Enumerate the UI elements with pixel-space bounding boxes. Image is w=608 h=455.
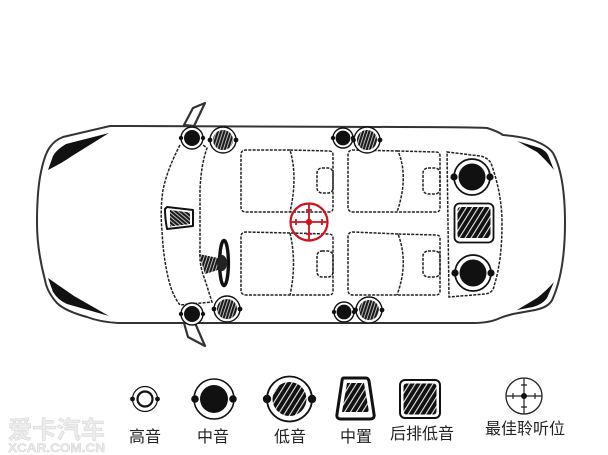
seat: front right xyxy=(241,232,333,295)
headlights xyxy=(48,133,554,316)
seat: front left xyxy=(241,150,333,212)
mid speaker: front left door xyxy=(179,127,205,149)
mid speaker: front right door xyxy=(179,303,205,325)
steering wheel xyxy=(199,240,228,286)
label: tweeter: 高音 xyxy=(129,428,161,446)
centre speaker xyxy=(165,207,193,229)
side mirrors xyxy=(184,103,205,346)
dashboard dashed outline xyxy=(161,145,212,305)
label: rear subwoofer: 后排低音 xyxy=(390,425,454,443)
mid speaker: rear right door xyxy=(332,302,356,322)
label: mid-range: 中音 xyxy=(197,428,229,446)
seat: rear right xyxy=(348,232,440,295)
legend: centre speaker xyxy=(337,378,374,446)
legend: rear subwoofer xyxy=(390,380,454,443)
mid speaker: rear left door xyxy=(331,128,355,148)
label: centre speaker: 中置 xyxy=(340,428,372,446)
legend: best listening position xyxy=(485,378,565,438)
low speaker: front left door xyxy=(208,127,238,153)
low speaker: rear right door xyxy=(353,297,384,323)
watermark: 爱卡汽车 xyxy=(8,417,105,444)
rear subwoofer xyxy=(454,204,494,242)
low speaker: front right door xyxy=(212,296,242,322)
rear deck mid speaker: lower xyxy=(451,255,495,291)
legend: woofer xyxy=(263,376,316,446)
best listening position marker (red) xyxy=(290,203,328,241)
label: best listening position: 最佳聆听位 xyxy=(485,420,565,438)
watermark: XCAR.COM.CN xyxy=(8,441,105,455)
car body outline xyxy=(37,126,565,323)
legend: mid-range xyxy=(191,379,237,446)
legend: tweeter xyxy=(129,386,161,446)
low speaker: rear left door xyxy=(351,127,382,153)
label: woofer: 低音 xyxy=(274,428,306,446)
seat: rear left xyxy=(348,150,440,212)
rear deck mid speaker: upper xyxy=(450,159,494,195)
trunk dashed outline xyxy=(447,152,502,297)
